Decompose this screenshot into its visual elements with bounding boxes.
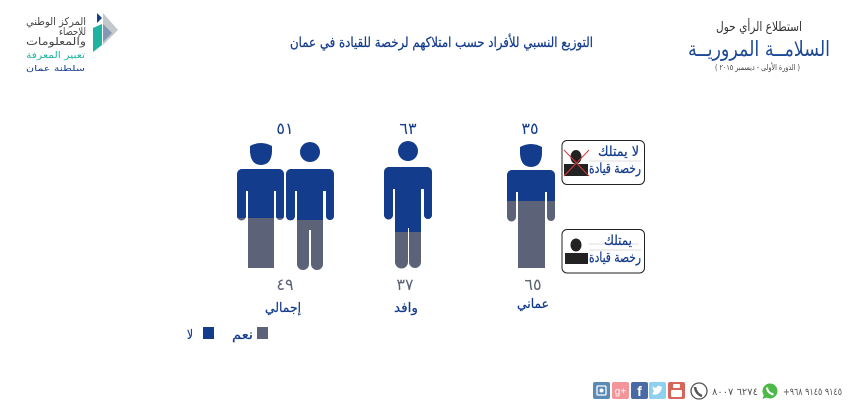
card text: driving licence: رخصة قيادة <box>589 161 641 177</box>
icon: male figure <box>286 142 334 270</box>
logo country: سلطنة عمان <box>26 64 85 73</box>
icon: person crossed out <box>564 150 589 176</box>
label: expatriate: وافد <box>394 301 418 316</box>
logo name text <box>26 16 86 48</box>
value: has licence expatriate: ٣٧ <box>396 275 414 294</box>
value: has licence omani: ٦٥ <box>524 275 542 294</box>
legend label: yes: نعم <box>232 328 253 343</box>
icon: google plus <box>612 382 629 399</box>
icon: facebook: f <box>637 383 642 399</box>
phone number: ٨٠٠٧ ٦٢٧٤ <box>712 387 758 398</box>
icon: female figure <box>507 144 555 268</box>
legend swatch: yes <box>257 327 268 339</box>
icon: youtube <box>668 382 685 399</box>
card text: does not have: لا يمتلك <box>598 144 639 160</box>
value: no licence expatriate: ٦٣ <box>399 119 417 138</box>
icon: twitter <box>649 382 666 399</box>
icon: instagram <box>593 382 610 399</box>
label: total: إجمالي <box>265 301 301 316</box>
whatsapp number: +٩٦٨ ٩١٤٥ ٩١٤٥ <box>783 387 842 398</box>
value: has licence total: ٤٩ <box>276 275 294 294</box>
survey round: ( الدورة الأولى - ديسمبر ٢٠١٥ ) <box>715 62 800 72</box>
survey heading <box>688 18 830 72</box>
icon: person <box>565 238 588 264</box>
figure: total <box>237 119 334 316</box>
main title: التوزيع النسبي للأفراد حسب امتلاكهم لرخصة للقيادة في عمان <box>290 33 593 51</box>
legend label: no: لا <box>187 328 193 343</box>
logo: national centre for statistics <box>26 13 118 73</box>
logo tagline: تعبير المعرفة <box>26 51 86 61</box>
label: omani: عماني <box>517 297 549 312</box>
legend swatch: no <box>203 327 214 339</box>
value: no licence omani: ٣٥ <box>521 119 539 138</box>
value: no licence total: ٥١ <box>276 119 294 138</box>
logo mark <box>93 13 118 52</box>
icon: phone <box>691 383 707 399</box>
figure: expatriate <box>384 119 432 316</box>
logo name text: المركز الوطني <box>26 16 86 28</box>
icon: male figure <box>384 141 432 268</box>
card text: driving licence: رخصة قيادة <box>589 250 641 266</box>
survey name: السلامــة المروريــة <box>688 37 830 61</box>
icon: female figure <box>237 143 284 268</box>
icon: facebook <box>631 382 648 399</box>
key card: no driving licence <box>562 140 644 184</box>
logo name text: والمعلومات <box>26 36 86 48</box>
figure: omani <box>507 119 555 312</box>
footer contact bar <box>593 382 842 399</box>
card text: has: يمتلك <box>604 233 632 249</box>
survey heading line 1: استطلاع الرأي حول <box>716 18 802 35</box>
logo name text: للإحصاء <box>59 26 86 38</box>
icon: google plus: g+ <box>615 386 626 398</box>
legend <box>187 327 268 343</box>
icon: whatsapp <box>762 384 778 399</box>
key card: has driving licence <box>562 230 644 273</box>
